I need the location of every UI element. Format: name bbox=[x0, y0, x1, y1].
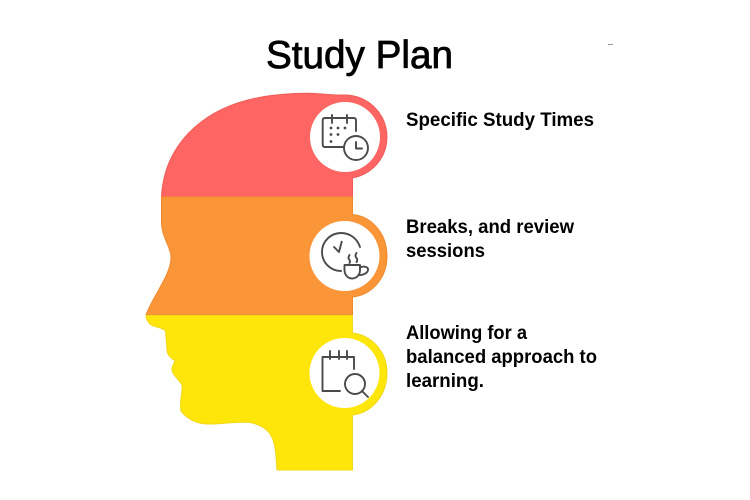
circle: yellow section icon background bbox=[310, 338, 380, 408]
panel: yellow head section bbox=[146, 316, 387, 470]
label: breaks and review sessions: sessions bbox=[406, 241, 485, 262]
circle: red section icon background bbox=[310, 102, 380, 172]
label: balanced approach to learning: balanced approach to bbox=[406, 347, 597, 368]
icon: calendar with magnifier bbox=[322, 351, 368, 397]
icon: clock with coffee cup bbox=[322, 233, 368, 278]
label: balanced approach to learning bbox=[406, 323, 597, 392]
panel: red head section bbox=[162, 93, 387, 197]
circle: orange section icon background bbox=[310, 221, 380, 291]
label: specific study times: Specific Study Times bbox=[406, 110, 594, 131]
icon: calendar with clock bbox=[323, 115, 368, 160]
panel: orange head section bbox=[146, 197, 387, 315]
label: breaks and review sessions: Breaks, and review bbox=[406, 217, 574, 238]
label: balanced approach to learning: Allowing for a bbox=[406, 323, 527, 344]
label: balanced approach to learning: learning. bbox=[406, 371, 484, 392]
title: Study Plan bbox=[266, 34, 453, 77]
head diagram bbox=[146, 93, 387, 470]
label: breaks and review sessions bbox=[406, 217, 574, 262]
